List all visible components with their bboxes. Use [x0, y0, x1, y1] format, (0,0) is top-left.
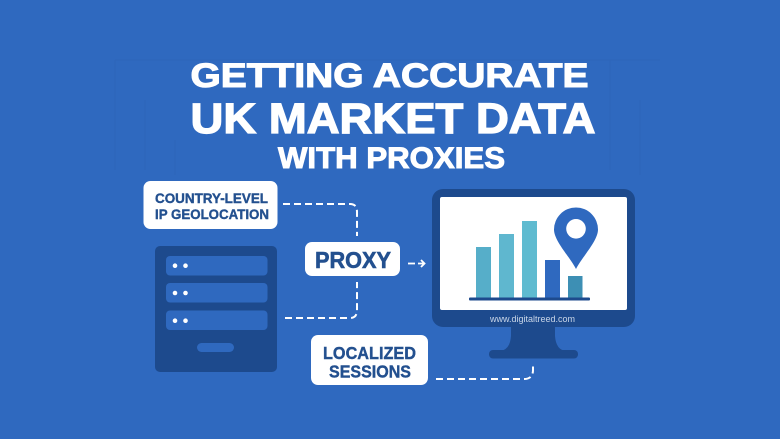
- arrow: proxy to monitor: [408, 260, 424, 267]
- bar chart: [469, 221, 590, 300]
- panel: localized sessions: [311, 335, 428, 385]
- arrow: sessions to monitor: [436, 363, 533, 379]
- title: UK MARKET DATA: [190, 95, 596, 143]
- title: WITH PROXIES: [278, 142, 505, 175]
- panel: country-level IP geolocation: COUNTRY-LEVEL: [155, 190, 268, 206]
- panel: localized sessions: LOCALIZED: [323, 343, 416, 363]
- panel: country-level IP geolocation: IP GEOLOCATION: [155, 206, 269, 222]
- icon: monitor: [432, 189, 635, 358]
- url text: www.digitaltreed.com: [489, 314, 575, 325]
- panel: localized sessions: SESSIONS: [329, 362, 411, 382]
- arrow: geolocation to proxy: [283, 204, 357, 236]
- icon: server: [155, 246, 277, 372]
- icon: location pin: [554, 208, 598, 269]
- title: [190, 57, 596, 175]
- panel: country-level IP geolocation: [144, 181, 278, 229]
- panel: proxy: PROXY: [315, 247, 391, 273]
- title: GETTING ACCURATE: [190, 57, 588, 95]
- arrow: server to proxy: [285, 282, 357, 318]
- panel: proxy: [305, 242, 400, 276]
